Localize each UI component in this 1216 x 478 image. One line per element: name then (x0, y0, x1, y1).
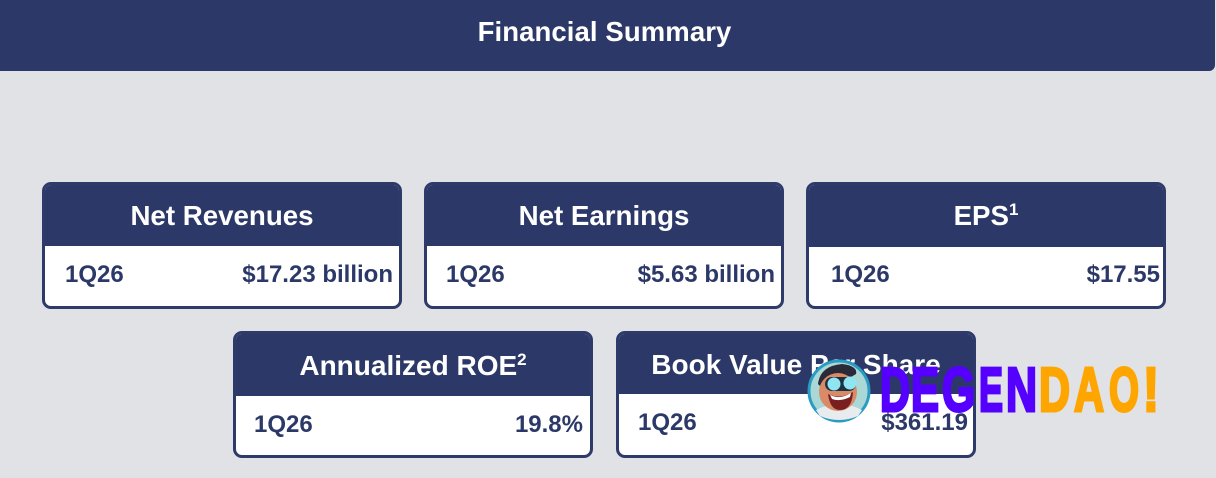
card heading (806, 182, 1166, 247)
logo wordmark: DAO!: D (1039, 356, 1070, 425)
logo wordmark: DAO!: ! (1143, 356, 1159, 425)
title: Financial Summary (478, 16, 731, 47)
header banner (0, 0, 1215, 71)
logo wordmark: DEGEN: G (942, 356, 975, 425)
logo wordmark: DEGEN: E (911, 356, 939, 425)
period label: 1Q26 (638, 409, 697, 436)
logo wordmark: DAO!: O (1109, 356, 1139, 425)
value: $17.55 (1087, 261, 1160, 288)
card: book value per share (616, 331, 976, 458)
card: EPS (806, 182, 1166, 309)
card heading: Annualized ROE2 (299, 350, 527, 381)
logo wordmark: DAO! (1039, 356, 1159, 425)
logo wordmark: DEGEN: D (880, 356, 910, 425)
logo wordmark: DEGEN (880, 356, 1037, 425)
logo wordmark: DEGEN: N (1006, 356, 1037, 425)
value: $17.23 billion (242, 261, 393, 288)
card: net revenues (42, 182, 402, 309)
card heading: Net Revenues (130, 200, 314, 231)
card heading (616, 331, 976, 394)
icon: mascot (809, 361, 869, 421)
value: $5.63 billion (638, 261, 775, 288)
value: $361.19 (881, 409, 968, 436)
card heading (233, 331, 593, 396)
value: 19.8% (515, 411, 583, 438)
card heading: Book Value Per Share (651, 349, 941, 380)
logo wordmark: DEGEN: E (979, 356, 1003, 425)
card: net earnings (424, 182, 784, 309)
period label: 1Q26 (65, 261, 124, 288)
card heading (42, 182, 402, 246)
period label: 1Q26 (254, 411, 313, 438)
card heading: EPS1 (954, 200, 1018, 231)
card heading: Net Earnings (519, 200, 689, 231)
card: annualized ROE (233, 331, 593, 458)
logo wordmark: DAO!: A (1074, 356, 1104, 425)
card heading (424, 182, 784, 246)
period label: 1Q26 (831, 261, 890, 288)
period label: 1Q26 (446, 261, 505, 288)
